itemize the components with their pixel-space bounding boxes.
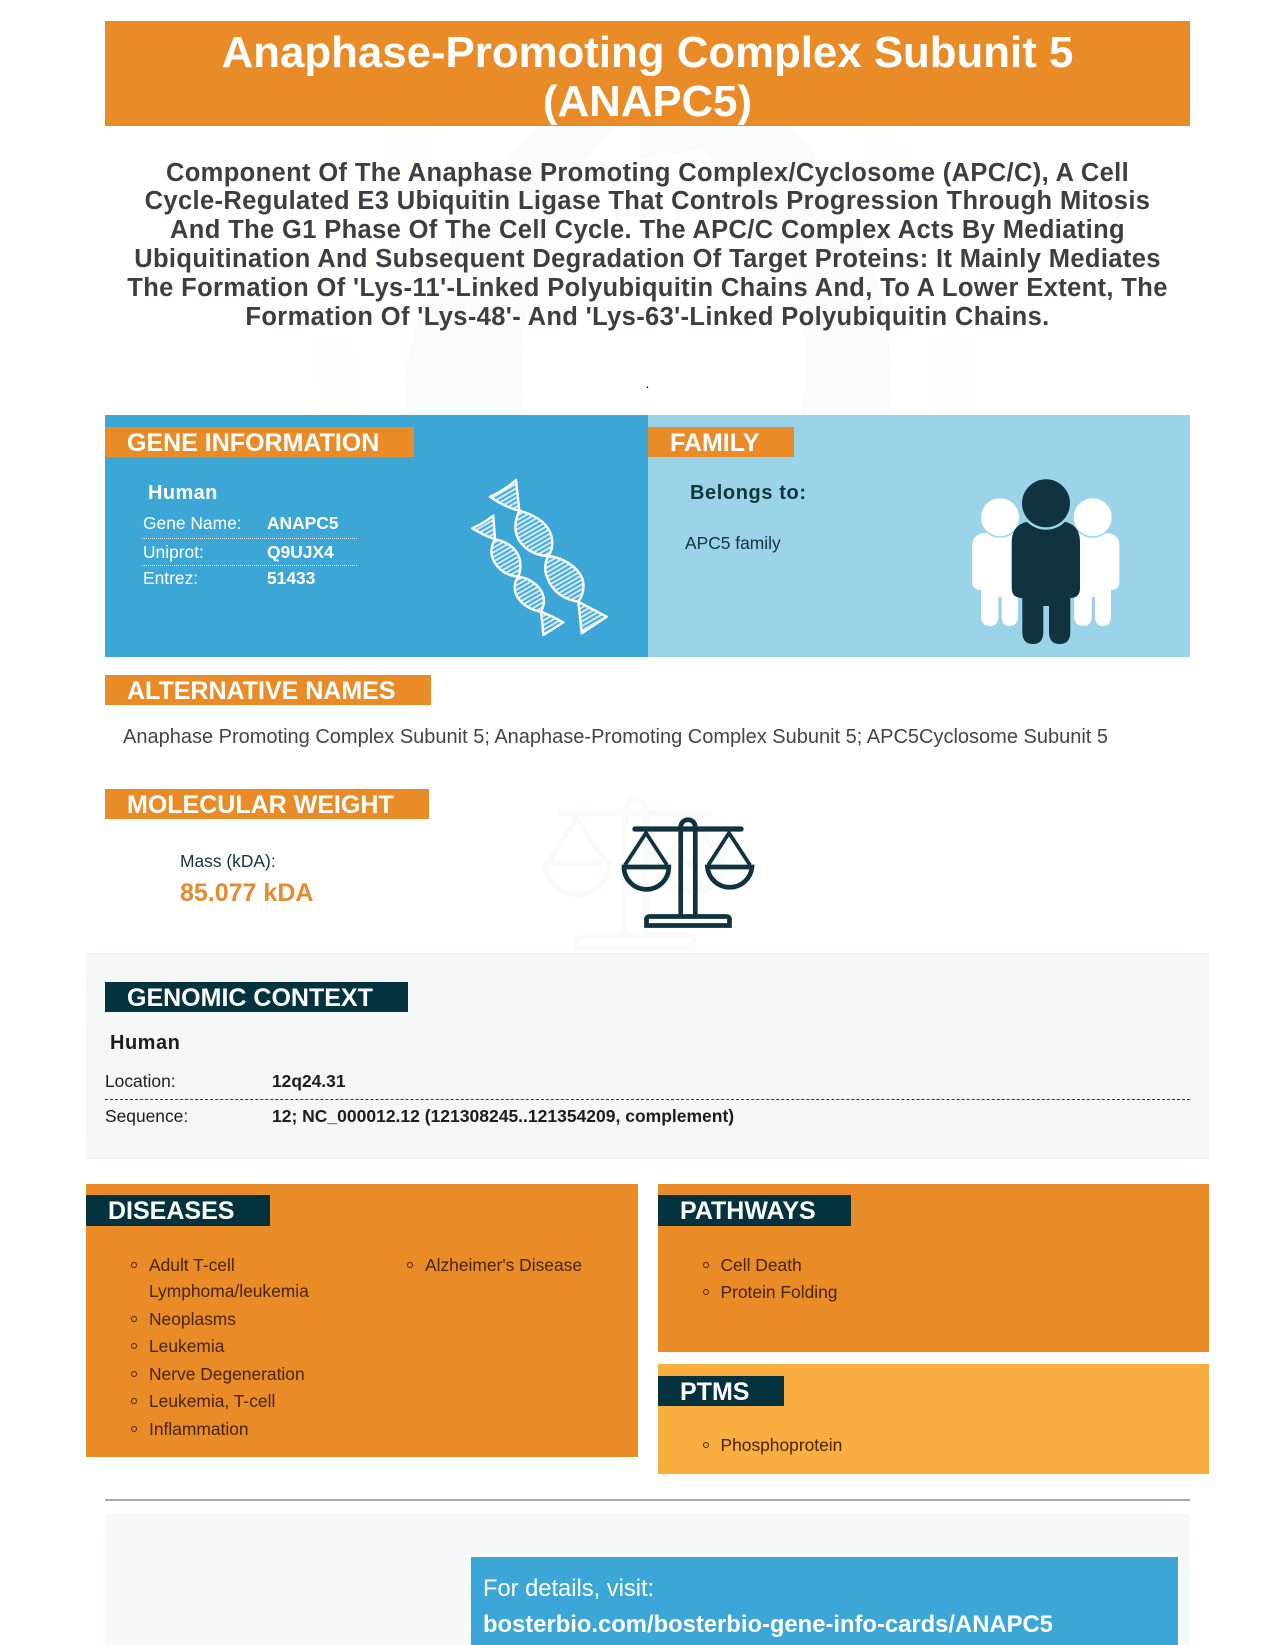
heading: family xyxy=(648,427,794,457)
description text: Component Of The Anaphase Promoting Complex/Cyclosome (APC/C), A Cell xyxy=(166,159,1129,187)
heading: ptms: PTMS xyxy=(680,1378,749,1406)
family name: APC5 family xyxy=(685,533,781,553)
panel: diseases xyxy=(86,1184,638,1457)
heading: molecular weight: MOLECULAR WEIGHT xyxy=(127,791,394,819)
panel: ptms xyxy=(658,1364,1209,1474)
heading: diseases: DISEASES xyxy=(108,1197,234,1225)
panel: footer xyxy=(105,1514,1190,1645)
ptm list: Phosphoprotein xyxy=(720,1435,842,1455)
description text: Formation Of 'Lys-48'- And 'Lys-63'-Linked Polyubiquitin Chains. xyxy=(245,303,1050,331)
panel: pathways xyxy=(658,1184,1209,1352)
stray dot: . xyxy=(646,375,649,391)
gene info table: Uniprot: xyxy=(143,542,204,562)
mass value: 85.077 kDA xyxy=(180,879,313,907)
visit label: For details, visit: xyxy=(483,1576,654,1602)
icon: balance scale xyxy=(622,817,755,928)
icon: ghost balance scale xyxy=(530,785,770,953)
gene info table xyxy=(142,513,357,588)
background watermark xyxy=(0,126,1288,415)
disease list: Inflammation xyxy=(149,1418,249,1438)
disease list: Nerve Degeneration xyxy=(149,1364,305,1384)
panel: family xyxy=(648,415,1190,657)
gene info table: Q9UJX4 xyxy=(267,542,334,562)
gene info table: 51433 xyxy=(267,568,315,588)
mass label: Mass (kDA): xyxy=(180,851,276,871)
alternative names text: Anaphase Promoting Complex Subunit 5; Anaphase-Promoting Complex Subunit 5; APC5Cyclosome Subunit 5 xyxy=(123,726,1108,748)
icon: people group xyxy=(972,479,1120,644)
disease list: Neoplasms xyxy=(149,1309,236,1329)
heading: family: FAMILY xyxy=(670,429,759,457)
panel: genomic context xyxy=(86,953,1209,1159)
url: bosterbio.com/bosterbio-gene-info-cards/ANAPC5 xyxy=(483,1611,1053,1638)
description text: Ubiquitination And Subsequent Degradation Of Target Proteins: It Mainly Mediates xyxy=(134,245,1161,273)
description text: The Formation Of 'Lys-11'-Linked Polyubiquitin Chains And, To A Lower Extent, The xyxy=(127,274,1168,302)
heading: pathways: PATHWAYS xyxy=(680,1197,816,1225)
heading: genomic context: GENOMIC CONTEXT xyxy=(127,984,373,1012)
species label: Human xyxy=(110,1032,180,1054)
belongs to label: Belongs to: xyxy=(690,482,807,504)
gene info table: Gene Name: xyxy=(143,513,242,533)
pathway list: Protein Folding xyxy=(720,1282,837,1302)
gene info table: ANAPC5 xyxy=(267,513,339,533)
disease list: Lymphoma/leukemia xyxy=(149,1281,309,1301)
pathway list xyxy=(703,1255,837,1302)
description text: Cycle-Regulated E3 Ubiquitin Ligase That Controls Progression Through Mitosis xyxy=(145,187,1150,215)
title banner xyxy=(105,21,1190,126)
species label: Human xyxy=(148,482,218,504)
title banner: (ANAPC5) xyxy=(543,76,752,126)
heading: diseases xyxy=(86,1195,270,1226)
pathway list: Cell Death xyxy=(720,1255,802,1275)
title banner: Anaphase-Promoting Complex Subunit 5 xyxy=(222,28,1073,76)
disease list: Leukemia, T-cell xyxy=(149,1390,275,1410)
disease list: Alzheimer's Disease xyxy=(425,1255,582,1275)
sequence row: 12; NC_000012.12 (121308245..121354209, complement) xyxy=(272,1106,734,1126)
disease list: Adult T-cell xyxy=(149,1255,235,1275)
location row: 12q24.31 xyxy=(272,1071,346,1091)
heading: ptms xyxy=(658,1376,784,1406)
divider line xyxy=(105,1499,1190,1501)
panel: gene information xyxy=(105,415,648,657)
disease list xyxy=(131,1255,582,1438)
description text: And The G1 Phase Of The Cell Cycle. The APC/C Complex Acts By Mediating xyxy=(170,216,1125,244)
heading: pathways xyxy=(658,1195,851,1226)
disease list: Leukemia xyxy=(149,1336,224,1356)
sequence row: Sequence: xyxy=(105,1106,188,1126)
callout: details link xyxy=(471,1557,1178,1645)
heading: gene information: GENE INFORMATION xyxy=(127,429,379,457)
row divider xyxy=(105,1099,1190,1100)
location row xyxy=(105,1071,346,1091)
location row: Location: xyxy=(105,1071,176,1091)
description text xyxy=(127,159,1168,331)
icon: dna helices xyxy=(471,478,608,636)
heading: alternative names: ALTERNATIVE NAMES xyxy=(127,677,396,705)
gene info table: Entrez: xyxy=(143,568,198,588)
